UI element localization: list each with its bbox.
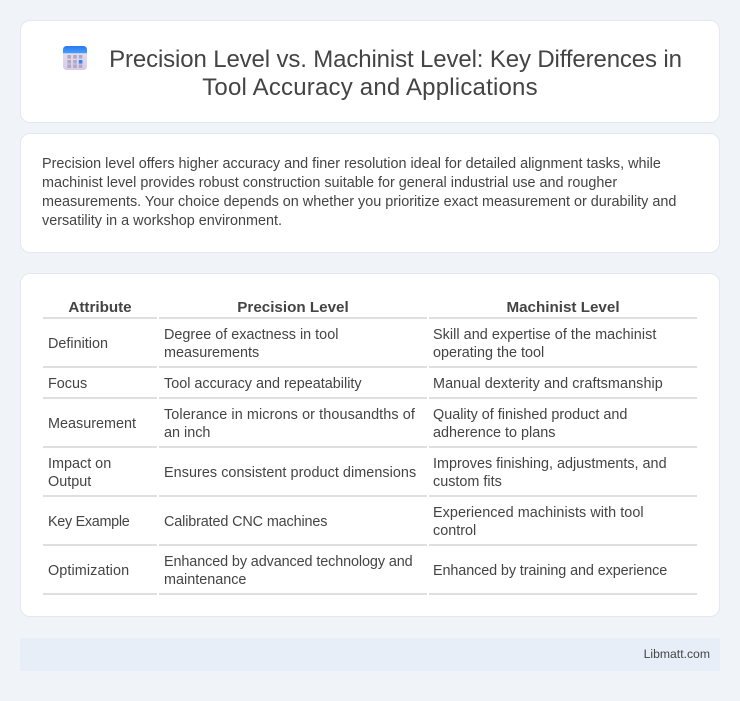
table header: Precision Level xyxy=(237,299,349,316)
row: definition: Definition xyxy=(48,336,108,352)
row: optimization xyxy=(43,554,697,595)
row: definition: operating the tool xyxy=(433,345,544,361)
row: focus: Tool accuracy and repeatability xyxy=(164,376,362,392)
row: optimization: Enhanced by training and experience xyxy=(433,563,667,579)
row: key example: control xyxy=(433,523,476,539)
row: impact on output: Ensures consistent product dimensions xyxy=(164,465,416,481)
row: focus: Manual dexterity and craftsmanship xyxy=(433,376,663,392)
row: measurement: adherence to plans xyxy=(433,425,555,441)
row: impact on output: custom fits xyxy=(433,474,502,490)
row: impact on output xyxy=(43,456,697,497)
panel: title card xyxy=(20,20,720,123)
row: measurement: Measurement xyxy=(48,416,136,432)
row: optimization: maintenance xyxy=(164,572,246,588)
panel: summary card xyxy=(20,133,720,253)
title xyxy=(109,46,682,101)
title: Tool Accuracy and Applications xyxy=(202,74,538,101)
icon: calendar xyxy=(63,46,87,70)
title: Precision Level vs. Machinist Level: Key Differences in xyxy=(109,46,682,73)
text block: summary: machinist level provides robust construction suitable for general industrial use and rougher xyxy=(42,175,617,191)
row: key example: Key Example xyxy=(48,514,129,530)
row: optimization: Enhanced by advanced technology and xyxy=(164,554,413,570)
row: definition: measurements xyxy=(164,345,259,361)
table header: Attribute xyxy=(68,299,132,316)
row: impact on output: Impact on xyxy=(48,456,111,472)
table header xyxy=(43,299,697,319)
row: definition: Degree of exactness in tool xyxy=(164,327,338,343)
row: measurement: Tolerance in microns or thousandths of xyxy=(164,407,415,423)
footer bar xyxy=(20,638,720,671)
row: key example xyxy=(43,505,697,546)
row: focus: Focus xyxy=(48,376,87,392)
row: key example: Calibrated CNC machines xyxy=(164,514,327,530)
footer credit: Libmatt.com xyxy=(644,647,710,661)
text block: summary: Precision level offers higher accuracy and finer resolution ideal for detailed alignment tasks, while xyxy=(42,156,661,172)
row: measurement xyxy=(43,407,697,448)
table: comparison xyxy=(43,299,697,595)
row: definition: Skill and expertise of the machinist xyxy=(433,327,656,343)
row: impact on output: Output xyxy=(48,474,91,490)
row: focus xyxy=(43,376,697,399)
row: measurement: Quality of finished product and xyxy=(433,407,627,423)
row: key example: Experienced machinists with tool xyxy=(433,505,644,521)
table header: Machinist Level xyxy=(506,299,620,316)
panel: comparison table xyxy=(20,273,720,617)
row: definition xyxy=(43,327,697,368)
row: optimization: Optimization xyxy=(48,563,129,579)
row: measurement: an inch xyxy=(164,425,210,441)
text block: summary xyxy=(42,156,676,229)
text block: summary: measurements. Your choice depends on whether you prioritize exact measurement or durability and xyxy=(42,194,676,210)
row: impact on output: Improves finishing, adjustments, and xyxy=(433,456,667,472)
text block: summary: versatility in a workshop environment. xyxy=(42,213,282,229)
